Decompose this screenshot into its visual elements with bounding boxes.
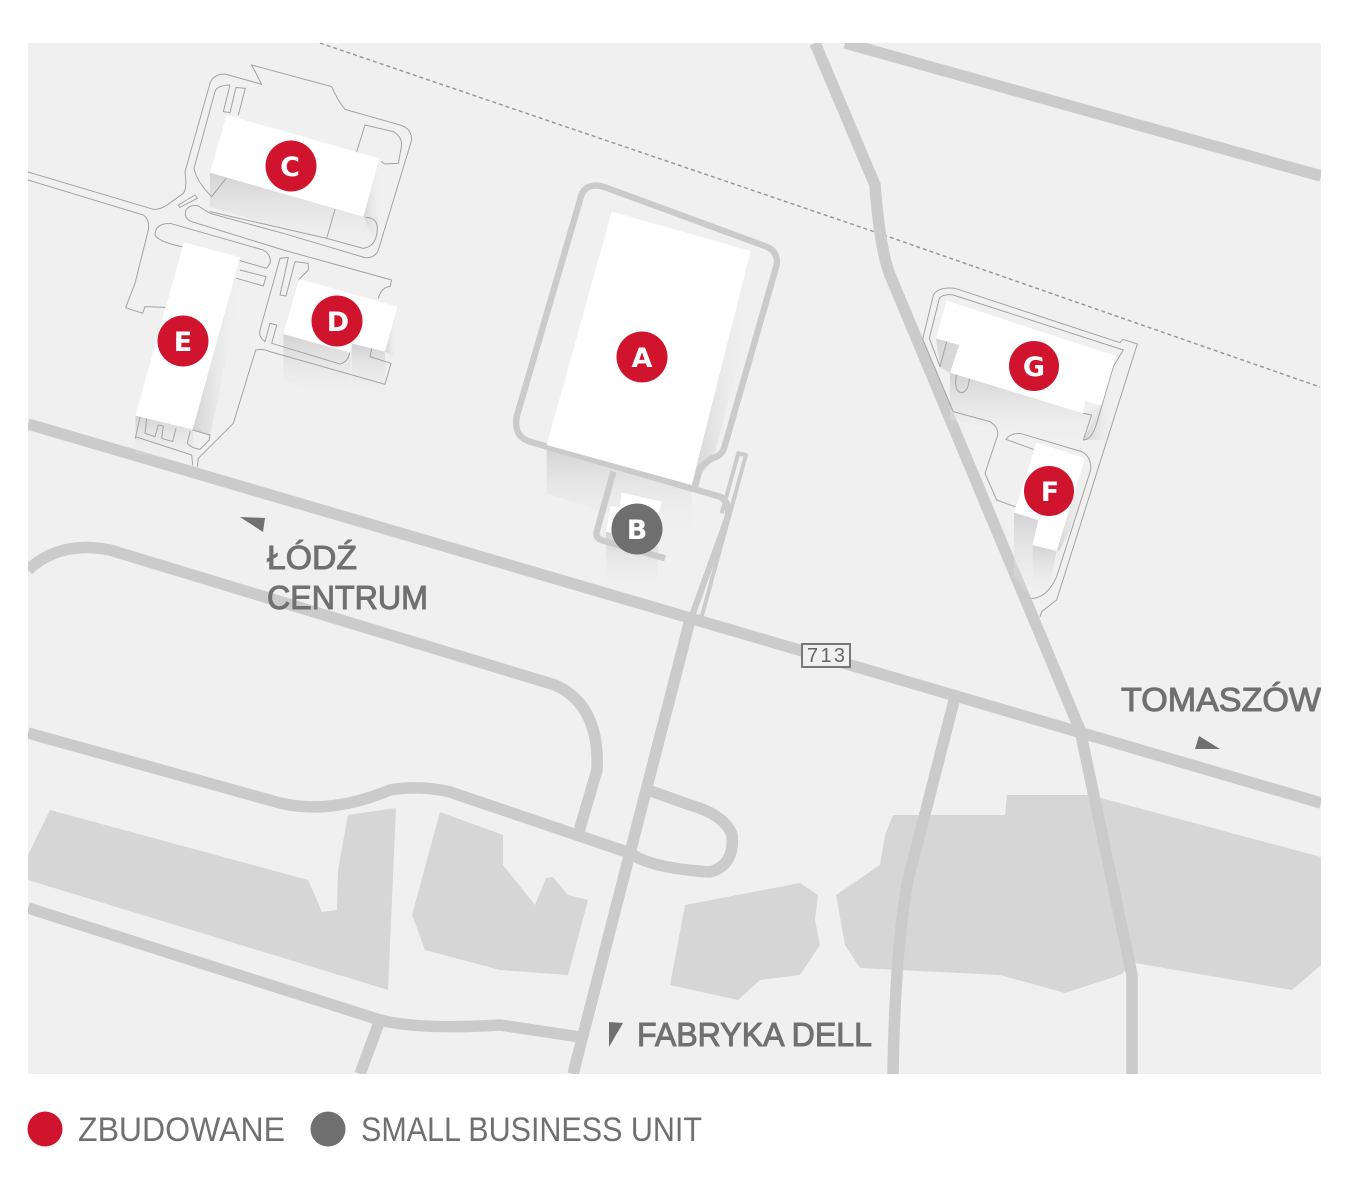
- access roads outline: [923, 288, 1137, 617]
- building G: [936, 301, 1116, 413]
- marker F: [1024, 466, 1074, 516]
- building shadows: [135, 172, 392, 438]
- site centre: buildings A, B: [516, 186, 777, 617]
- building shadows: [936, 338, 1102, 574]
- building E: [135, 242, 240, 429]
- arrow: Łódź Centrum: [240, 517, 265, 532]
- marker C: C: [280, 152, 300, 183]
- access roads outline: [28, 65, 412, 467]
- marker E: [158, 316, 208, 366]
- marker A: [616, 332, 668, 382]
- marker B: B: [627, 515, 647, 546]
- building C: [210, 115, 379, 217]
- site west: buildings C, D, E: [28, 65, 412, 467]
- marker F: F: [1041, 477, 1059, 508]
- road sign 713: 713: [807, 645, 845, 667]
- site ring road: [516, 186, 777, 617]
- building B: [606, 492, 662, 532]
- label: Łódź Centrum: [267, 539, 428, 616]
- marker D: [312, 296, 362, 346]
- green areas: [28, 795, 1321, 1000]
- building A: [547, 212, 751, 485]
- marker G: G: [1023, 352, 1045, 383]
- building D: [283, 279, 397, 353]
- arrow: Fabryka Dell: [609, 1022, 623, 1047]
- railway dashed line: [320, 43, 1320, 387]
- marker A: A: [632, 343, 653, 374]
- building F: [1014, 443, 1085, 551]
- legend item: small business unit: SMALL BUSINESS UNIT: [361, 1111, 702, 1149]
- label: Tomaszów: TOMASZÓW: [1121, 681, 1322, 718]
- site east: buildings F, G: [923, 288, 1137, 617]
- building shadows: [546, 373, 720, 562]
- marker C: [266, 140, 316, 192]
- label: Fabryka Dell: FABRYKA DELL: [637, 1016, 872, 1053]
- arrow: Tomaszów: [1195, 736, 1220, 749]
- marker D: D: [327, 307, 349, 338]
- marker G: [1009, 341, 1059, 391]
- label: Łódź Centrum: ŁÓDŹ: [267, 539, 357, 576]
- marker E: E: [174, 327, 192, 358]
- legend: [28, 1111, 702, 1149]
- legend item: zbudowane: ZBUDOWANE: [78, 1111, 285, 1149]
- label: Łódź Centrum: CENTRUM: [267, 579, 428, 616]
- marker B: [612, 504, 662, 554]
